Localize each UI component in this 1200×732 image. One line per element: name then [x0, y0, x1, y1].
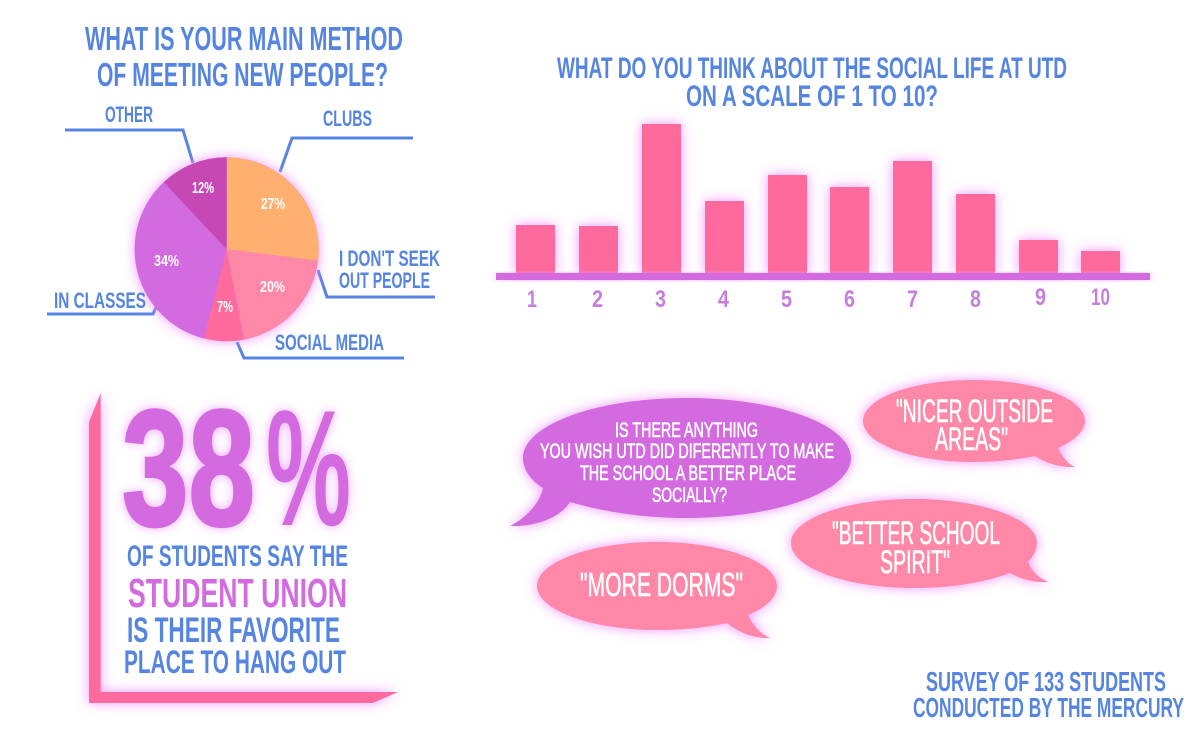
big number: %: [266, 376, 351, 560]
speech bubble: more dorms: "MORE DORMS": [580, 566, 743, 603]
title: meeting new people: WHAT IS YOUR MAIN METHOD: [85, 20, 403, 57]
pie percentages: 27%: [261, 196, 285, 213]
pie category labels: SOCIAL MEDIA: [275, 330, 384, 355]
pie category labels: OTHER: [105, 102, 153, 127]
speech bubble: nicer outside areas: AREAS": [935, 421, 1008, 457]
speech bubble: more dorms: [537, 542, 777, 638]
callout text: PLACE TO HANG OUT: [124, 644, 346, 680]
speech bubble: question: THE SCHOOL A BETTER PLACE: [580, 462, 796, 485]
axis labels: 6: [844, 286, 855, 313]
speech bubble: question: SOCIALLY?: [652, 484, 727, 507]
speech bubble: better school spirit: SPIRIT": [880, 544, 950, 580]
speech bubble: better school spirit: [791, 499, 1049, 588]
speech bubble: question: YOU WISH UTD DID DIFERENTLY TO MAKE: [540, 440, 834, 463]
axis labels: 7: [907, 286, 918, 313]
title: social life rating: [557, 52, 1067, 113]
axis labels: 10: [1091, 284, 1110, 311]
pie slices: [135, 157, 319, 341]
axis labels: 9: [1035, 284, 1046, 311]
pie category labels: OUT PEOPLE: [339, 268, 430, 293]
title: meeting new people: [85, 20, 403, 93]
pie percentages: [154, 180, 285, 316]
axis labels: [527, 284, 1110, 313]
axis labels: 8: [970, 286, 981, 313]
title: social life rating: ON A SCALE OF 1 TO 10?: [686, 80, 938, 113]
speech bubble: question: [510, 398, 851, 526]
pie category labels: [54, 102, 440, 355]
speech bubble: nicer outside areas: [863, 380, 1085, 467]
pie percentages: 20%: [260, 279, 285, 296]
panel: 38 percent callout: [89, 376, 398, 703]
pie leader lines: [47, 130, 435, 358]
corner bracket: [89, 393, 398, 703]
pie category labels: I DON'T SEEK: [339, 246, 440, 271]
axis labels: 3: [655, 286, 666, 313]
pie chart: meeting methods: [47, 102, 440, 358]
pie percentages: 34%: [154, 253, 179, 270]
axis labels: 5: [781, 286, 792, 313]
callout text: STUDENT UNION: [128, 570, 347, 616]
callout text: IS THEIR FAVORITE: [127, 611, 340, 650]
pie percentages: 12%: [192, 180, 214, 197]
title: meeting new people: OF MEETING NEW PEOPLE?: [97, 56, 388, 93]
speech bubble: nicer outside areas: "NICER OUTSIDE: [896, 393, 1053, 429]
bars: [516, 124, 1120, 274]
callout text: [124, 540, 348, 680]
axis: [496, 273, 1150, 280]
speech bubble: better school spirit: "BETTER SCHOOL: [832, 515, 1000, 551]
axis labels: 2: [592, 286, 603, 313]
bar chart: social life scale: [496, 124, 1150, 313]
survey source note: [913, 666, 1184, 723]
speech bubble: question: IS THERE ANYTHING: [615, 419, 758, 442]
pie category labels: IN CLASSES: [54, 288, 146, 313]
callout text: OF STUDENTS SAY THE: [127, 540, 348, 573]
axis labels: 1: [527, 286, 537, 313]
axis labels: 4: [718, 286, 730, 313]
pie percentages: 7%: [217, 299, 233, 316]
pie category labels: CLUBS: [323, 106, 372, 131]
big number: 38: [122, 376, 255, 560]
